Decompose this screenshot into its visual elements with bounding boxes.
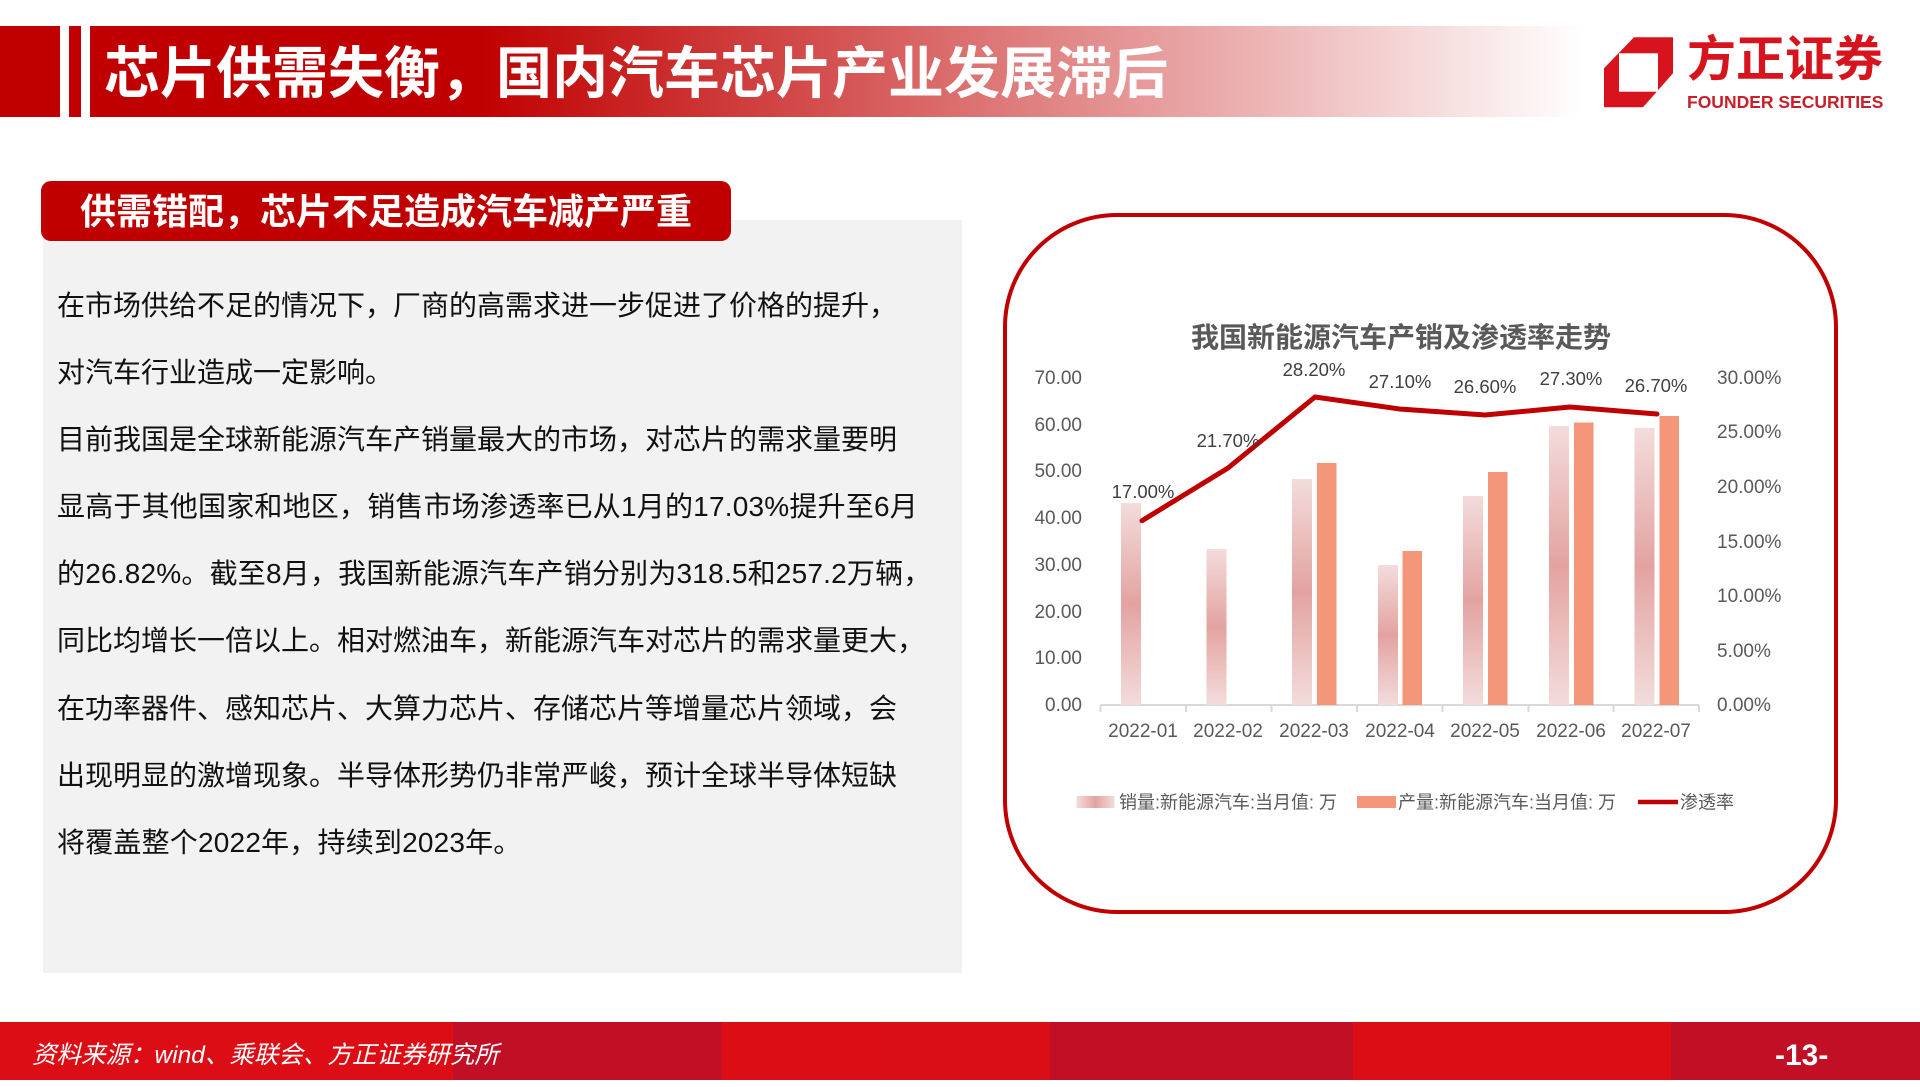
header block: narrow stripe xyxy=(69,26,81,117)
body text: 在市场供给不足的情况下，厂商的高需求进一步促进了价格的提升， xyxy=(57,290,897,321)
header block: left square xyxy=(0,26,60,117)
body text: 出现明显的激增现象。半导体形势仍非常严峻，预计全球半导体短缺 xyxy=(57,760,897,791)
line data labels: 27.10% xyxy=(1369,371,1431,392)
logo wordmark English: FOUNDER SECURITIES xyxy=(1687,92,1883,112)
left axis labels: 60.00 xyxy=(1034,415,1082,436)
body text xyxy=(57,290,931,858)
category labels: 2022-06 xyxy=(1536,721,1606,742)
panel: text background xyxy=(43,220,962,973)
left axis labels: 50.00 xyxy=(1034,461,1082,482)
left axis labels xyxy=(1034,368,1082,716)
section heading tag xyxy=(41,181,731,241)
production bars xyxy=(1317,416,1679,705)
left axis labels: 30.00 xyxy=(1034,555,1082,576)
body text: 目前我国是全球新能源汽车产销量最大的市场，对芯片的需求量要明 xyxy=(57,424,897,455)
footer bar xyxy=(0,1022,1920,1080)
card outline xyxy=(1005,215,1836,912)
body text: 对汽车行业造成一定影响。 xyxy=(57,357,393,388)
right axis labels: 25.00% xyxy=(1717,422,1782,443)
body text: 在功率器件、感知芯片、大算力芯片、存储芯片等增量芯片领域，会 xyxy=(57,693,897,724)
line data labels: 28.20% xyxy=(1283,359,1345,380)
line data labels: 17.00% xyxy=(1112,481,1174,502)
legend: 渗透率 xyxy=(1680,792,1734,812)
section heading tag: 供需错配，芯片不足造成汽车减产严重 xyxy=(80,191,692,232)
logo wordmark Chinese: 方正证券 xyxy=(1687,33,1883,87)
category labels: 2022-05 xyxy=(1450,721,1520,742)
left axis labels: 70.00 xyxy=(1034,368,1082,389)
left axis labels: 10.00 xyxy=(1034,648,1082,669)
category labels xyxy=(1108,721,1691,742)
body text: 将覆盖整个2022年，持续到2023年。 xyxy=(57,827,522,858)
body text: 显高于其他国家和地区，销售市场渗透率已从1月的17.03%提升至6月 xyxy=(57,491,918,522)
right axis labels xyxy=(1717,368,1782,716)
body text: 的26.82%。截至8月，我国新能源汽车产销分别为318.5和257.2万辆， xyxy=(57,558,931,589)
logo mark xyxy=(1604,37,1673,108)
category labels: 2022-02 xyxy=(1193,721,1263,742)
header gradient band xyxy=(90,26,1584,117)
right axis labels: 5.00% xyxy=(1717,641,1771,662)
left axis labels: 20.00 xyxy=(1034,602,1082,623)
line data labels: 26.60% xyxy=(1454,376,1516,397)
right axis labels: 10.00% xyxy=(1717,586,1782,607)
page number: -13- xyxy=(1775,1039,1828,1072)
title: 芯片供需失衡，国内汽车芯片产业发展滞后 xyxy=(104,42,1168,105)
right axis labels: 15.00% xyxy=(1717,532,1782,553)
sales bars xyxy=(1121,426,1654,705)
line data labels: 26.70% xyxy=(1625,375,1687,396)
penetration rate line xyxy=(1142,397,1657,521)
logo: Founder Securities xyxy=(1604,33,1883,112)
line data labels xyxy=(1112,359,1687,502)
category labels: 2022-04 xyxy=(1365,721,1435,742)
right axis labels: 0.00% xyxy=(1717,695,1771,716)
x axis xyxy=(1100,705,1699,712)
right axis labels: 20.00% xyxy=(1717,477,1782,498)
legend xyxy=(1076,792,1734,812)
category labels: 2022-01 xyxy=(1108,721,1178,742)
chart title: 我国新能源汽车产销及渗透率走势 xyxy=(1191,322,1611,353)
right axis labels: 30.00% xyxy=(1717,368,1782,389)
footer source note: 资料来源：wind、乘联会、方正证券研究所 xyxy=(32,1042,499,1069)
category labels: 2022-07 xyxy=(1621,721,1691,742)
body text: 同比均增长一倍以上。相对燃油车，新能源汽车对芯片的需求量更大， xyxy=(57,625,925,656)
legend: 销量:新能源汽车:当月值: 万 xyxy=(1119,792,1337,812)
line data labels: 21.70% xyxy=(1197,430,1259,451)
category labels: 2022-03 xyxy=(1279,721,1349,742)
left axis labels: 40.00 xyxy=(1034,508,1082,529)
legend: 产量:新能源汽车:当月值: 万 xyxy=(1398,792,1616,812)
left axis labels: 0.00 xyxy=(1045,695,1082,716)
line data labels: 27.30% xyxy=(1540,368,1602,389)
header bar xyxy=(0,26,1548,117)
